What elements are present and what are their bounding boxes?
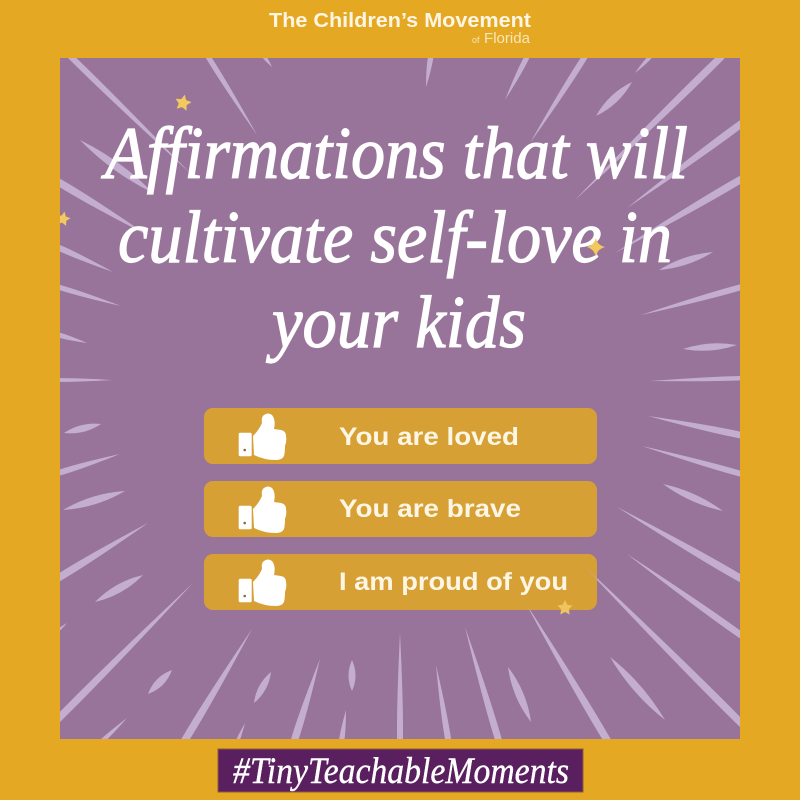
icon: star top left [174, 93, 193, 111]
title: cultivate self-love in [118, 197, 672, 279]
logo: The Children's Movement of Florida: Florida [484, 30, 531, 47]
icon: thumbs up [239, 486, 286, 533]
logo: The Children's Movement of Florida [269, 10, 531, 47]
faint ray tips over button [526, 562, 597, 610]
icon: star left edge [60, 212, 70, 226]
logo: The Children's Movement of Florida: of [472, 35, 480, 45]
button: I am proud of you [204, 554, 597, 610]
title: Affirmations that will [100, 113, 688, 195]
icon: sparkle on title [587, 238, 605, 257]
title [100, 113, 688, 364]
title: your kids [265, 282, 526, 364]
button: You are brave [204, 481, 597, 537]
icon: star near bottom button [557, 600, 573, 614]
label: You are brave [339, 495, 521, 523]
icon: thumbs up [239, 414, 286, 460]
label: You are loved [339, 423, 519, 451]
panel: purple sunburst [60, 58, 740, 739]
logo: The Children's Movement of Florida: The Children’s Movement [269, 10, 531, 32]
hashtag banner: #TinyTeachableMoments [233, 751, 569, 792]
button: You are loved [204, 408, 597, 464]
sunburst rays [52, 50, 748, 747]
icon: thumbs up [239, 560, 286, 606]
label: I am proud of you [339, 568, 568, 596]
